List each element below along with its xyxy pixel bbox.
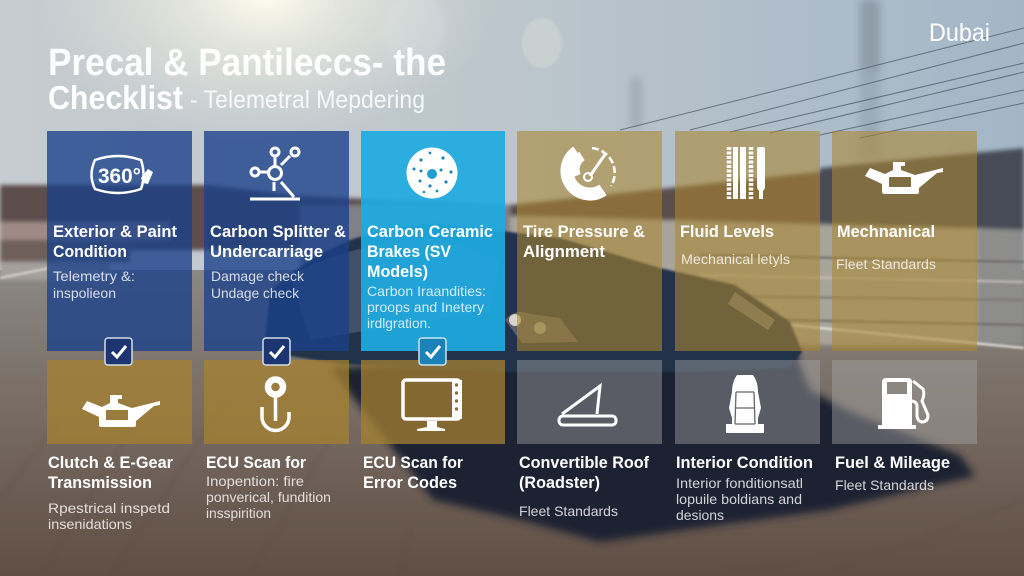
heading: [48, 453, 173, 492]
icon: tread and dipstick: [729, 147, 765, 199]
description: [48, 500, 170, 532]
icon: oil can: [865, 162, 943, 194]
description: Fleet Standards: [836, 256, 936, 272]
description: [367, 283, 486, 331]
heading: Condition: [53, 242, 127, 261]
heading: Undercarriage: [210, 242, 323, 261]
panel: clutch and e-gear: [47, 360, 192, 532]
description: lopuile boldians and: [676, 491, 802, 507]
heading: Tire Pressure &: [523, 222, 645, 241]
heading: Brakes (SV: [367, 242, 452, 261]
description: Inopention: fire: [206, 473, 304, 489]
header: title: - Telemetral Mepdering: [190, 86, 425, 114]
description: Fleet Standards: [835, 477, 934, 493]
description: [206, 473, 331, 521]
heading: (Roadster): [519, 473, 600, 492]
icon: tire gauge: [567, 148, 615, 194]
icon: 360 view: 360°: [98, 165, 141, 188]
icon: seat: [726, 375, 764, 433]
description: Telemetry &:: [53, 268, 135, 284]
icon: oil can: [82, 395, 160, 427]
heading: [367, 222, 493, 281]
panel: ecu scan inspection: [204, 360, 349, 521]
description: proops and Inetery: [367, 299, 484, 315]
description: [53, 268, 135, 301]
panel: fuel and mileage: [832, 360, 977, 493]
heading: Alignment: [523, 242, 605, 261]
panel: ecu scan error codes: [361, 360, 505, 492]
header: title: Checklist: [48, 79, 183, 116]
icon: splitter nodes: [250, 148, 300, 199]
icon: 360 view: [92, 156, 153, 193]
description: [211, 268, 305, 301]
icon: convertible roof: [559, 386, 616, 425]
heading: [523, 222, 645, 261]
heading: [519, 453, 649, 492]
panel: mechanical: [832, 131, 977, 351]
heading: Transmission: [48, 473, 152, 492]
heading: Error Codes: [363, 473, 457, 492]
panel: interior condition: [675, 360, 820, 523]
heading: Fuel & Mileage: [835, 453, 950, 472]
description: Damage check: [211, 268, 305, 284]
heading: Interior Condition: [676, 453, 813, 472]
panel: convertible roof: [517, 360, 662, 519]
description: Interior fonditionsatl: [676, 475, 803, 491]
icon: monitor: [403, 380, 462, 431]
description: Mechanical letyls: [681, 251, 790, 267]
description: Rpestrical inspetd: [48, 500, 170, 516]
header: title: [48, 42, 446, 116]
heading: [363, 453, 463, 492]
description: Carbon Iraandities:: [367, 283, 486, 299]
header: title: Precal & Pantileccs- the: [48, 42, 446, 84]
heading: Exterior & Paint: [53, 222, 177, 241]
heading: Carbon Splitter &: [210, 222, 346, 241]
description: Fleet Standards: [519, 503, 618, 519]
heading: Mechnanical: [837, 222, 935, 241]
heading: Convertible Roof: [519, 453, 649, 472]
heading: [53, 222, 177, 261]
description: ponverical, fundition: [206, 489, 331, 505]
description: inspolieon: [53, 285, 116, 301]
heading: Models): [367, 262, 428, 281]
heading: Fluid Levels: [680, 222, 774, 241]
panel: carbon splitter: [204, 131, 349, 351]
icon: fuel pump: [878, 378, 928, 429]
panel: tire pressure: [517, 131, 662, 351]
checkbox: exterior: [105, 338, 132, 365]
description: insspirition: [206, 505, 271, 521]
panel: carbon ceramic brakes: [361, 131, 505, 351]
description: [676, 475, 803, 523]
heading: Carbon Ceramic: [367, 222, 493, 241]
icon: hook: [262, 380, 289, 430]
heading: ECU Scan for: [363, 453, 463, 472]
description: insenidations: [48, 516, 132, 532]
description: desions: [676, 507, 724, 523]
icon: brake disc: [406, 148, 458, 198]
panel: fluid levels: [675, 131, 820, 351]
heading: ECU Scan for: [206, 453, 306, 472]
checkbox: brakes: [419, 338, 446, 365]
heading: Clutch & E-Gear: [48, 453, 173, 472]
heading: [210, 222, 346, 261]
panel: exterior and paint: [47, 131, 192, 351]
checkbox: splitter: [263, 338, 290, 365]
description: irdlgration.: [367, 315, 431, 331]
description: Undage check: [211, 285, 300, 301]
location label: Dubai: [929, 19, 990, 47]
